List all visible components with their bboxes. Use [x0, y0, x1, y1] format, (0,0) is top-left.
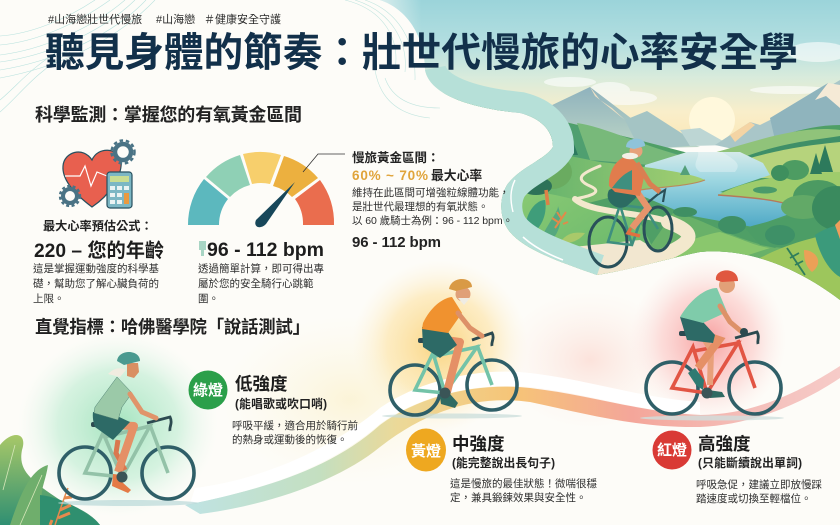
tags: ＃健康安全守護	[204, 12, 281, 26]
scenery panel	[370, 0, 840, 310]
formula block: 礎，幫助您了解心臟負荷的	[33, 277, 159, 290]
green light label: (能唱歌或吹口哨)	[235, 397, 327, 411]
yellow light label: (能完整說出長句子)	[452, 456, 555, 470]
gear bottom	[60, 186, 80, 206]
bpm result block: 透過簡單計算，即可得出專	[198, 262, 324, 275]
arm	[720, 306, 742, 332]
golden zone callout: 慢旅黃金區間：	[352, 150, 440, 165]
saddle	[418, 338, 431, 343]
green cyclist	[58, 352, 198, 506]
golden zone callout: 96 - 112 bpm	[352, 234, 441, 251]
jersey	[94, 377, 132, 420]
needle	[255, 182, 295, 227]
handlebar	[735, 332, 758, 344]
arm	[458, 313, 482, 336]
tags: #山海戀	[156, 12, 195, 26]
head	[719, 277, 735, 293]
green light label: 的熱身或運動後的恢復。	[232, 433, 348, 446]
formula block	[33, 218, 164, 305]
heading: science monitoring: 科學監測：掌握您的有氧黃金區間	[35, 104, 302, 125]
sky	[370, 0, 840, 140]
saddle	[91, 422, 105, 427]
red light label: 呼吸急促，建議立即放慢踩	[696, 478, 822, 491]
far leg	[705, 340, 711, 385]
leader line	[303, 154, 345, 172]
icon: small marker	[199, 241, 206, 256]
shadow	[58, 500, 198, 506]
foreground leaves bottom left	[0, 435, 100, 525]
foreground plants in scenery	[526, 190, 840, 278]
crank	[440, 388, 450, 398]
shorts	[93, 412, 130, 440]
golden zone callout: 維持在此區間可增強粒線體功能，	[352, 186, 510, 199]
shoe	[440, 394, 458, 408]
golden zone callout: 60% ~ 70%	[352, 168, 428, 183]
golden zone callout: 是壯世代最理想的有氧狀態。	[352, 200, 488, 213]
back hills	[440, 90, 840, 178]
red light label	[652, 430, 822, 505]
decorative contour lines: title right	[345, 0, 440, 118]
formula block: 220 – 您的年齡	[34, 239, 164, 262]
bpm result block	[198, 239, 324, 305]
calculator	[107, 172, 132, 208]
icon: heart with calculator and gears	[60, 140, 134, 208]
head	[456, 286, 470, 302]
bpm result block: 96 - 112 bpm	[207, 239, 324, 261]
wheels	[646, 362, 781, 414]
red light label: 高強度	[698, 434, 750, 454]
heart	[63, 150, 121, 207]
wheels	[390, 360, 517, 415]
near leg	[695, 332, 719, 368]
golden zone callout: 最大心率	[431, 168, 482, 183]
near leg	[112, 425, 134, 472]
red light label: (只能斷續說出單詞)	[698, 456, 802, 470]
road foreground	[545, 240, 656, 275]
background glows and ribbon	[18, 258, 840, 517]
yellow light label: 黃燈	[411, 443, 441, 460]
lake	[640, 152, 795, 227]
helmet	[117, 352, 140, 365]
mountains	[495, 80, 840, 155]
shadow	[382, 414, 522, 418]
wheels	[59, 447, 194, 499]
red light label: 踏速度或切換至輕檔位。	[696, 492, 812, 505]
sock and shoe	[112, 474, 131, 493]
green light label	[188, 370, 358, 446]
shorts	[680, 317, 715, 343]
shadow	[640, 416, 784, 420]
formula block: 最大心率預估公式：	[43, 218, 153, 233]
decorative contour lines: top left	[0, 0, 155, 112]
shorts	[422, 327, 457, 358]
far shoe	[708, 390, 725, 398]
yellow light label: 定，兼具鍛鍊效果與安全性。	[450, 491, 586, 504]
bpm result block: 屬於您的安全騎行心跳範	[198, 277, 314, 290]
jersey	[680, 288, 727, 323]
teal ribbon edge	[425, 70, 597, 275]
arm	[130, 394, 156, 418]
frame	[672, 340, 755, 393]
gauge chart	[188, 152, 345, 227]
formula block: 這是掌握運動強度的科學基	[33, 262, 159, 275]
crank	[702, 388, 712, 398]
cyclist on the scenic road	[589, 139, 672, 267]
green light label: 低強度	[235, 374, 288, 394]
winding road	[575, 166, 689, 285]
golden zone callout	[352, 150, 513, 251]
red light label: 紅燈	[657, 441, 687, 459]
base land	[454, 98, 840, 300]
red cyclist	[640, 270, 784, 420]
head	[127, 363, 139, 378]
green light label: 綠燈	[193, 381, 223, 399]
peninsula and mid hills	[500, 150, 840, 310]
sun	[689, 97, 735, 143]
yellow light label: 這是慢旅的最佳狀態！微喘很穩	[450, 477, 597, 490]
handlebar	[472, 333, 493, 346]
green light label: 呼吸平緩，適合用於騎行前	[232, 419, 358, 432]
orange cyclist	[382, 279, 522, 418]
sock and shoe	[688, 368, 704, 390]
frame	[415, 345, 492, 393]
near leg	[445, 340, 460, 392]
formula block: 上限。	[33, 293, 64, 305]
gear top	[112, 140, 134, 164]
bike frame and wheels	[589, 190, 672, 267]
tags: #山海戀壯世代慢旅	[48, 12, 142, 26]
helmet	[449, 279, 472, 291]
heading: talk test: 直覺指標：哈佛醫學院「說話測試」	[35, 317, 310, 337]
clouds	[544, 42, 840, 105]
title: 聽見身體的節奏：壯世代慢旅的心率安全學	[45, 31, 798, 75]
saddle	[679, 331, 693, 336]
rider	[608, 184, 640, 208]
golden zone callout: 以 60 歲騎士為例：96 - 112 bpm。	[352, 214, 513, 227]
handlebar	[147, 417, 171, 431]
frame	[85, 425, 168, 477]
yellow light label	[406, 428, 597, 504]
far leg	[116, 440, 125, 470]
jersey	[422, 297, 462, 333]
glove	[740, 328, 748, 336]
trees	[528, 144, 840, 245]
bpm result block: 圍。	[198, 293, 219, 305]
yellow light label: 中強度	[452, 434, 504, 454]
crank	[116, 472, 128, 482]
